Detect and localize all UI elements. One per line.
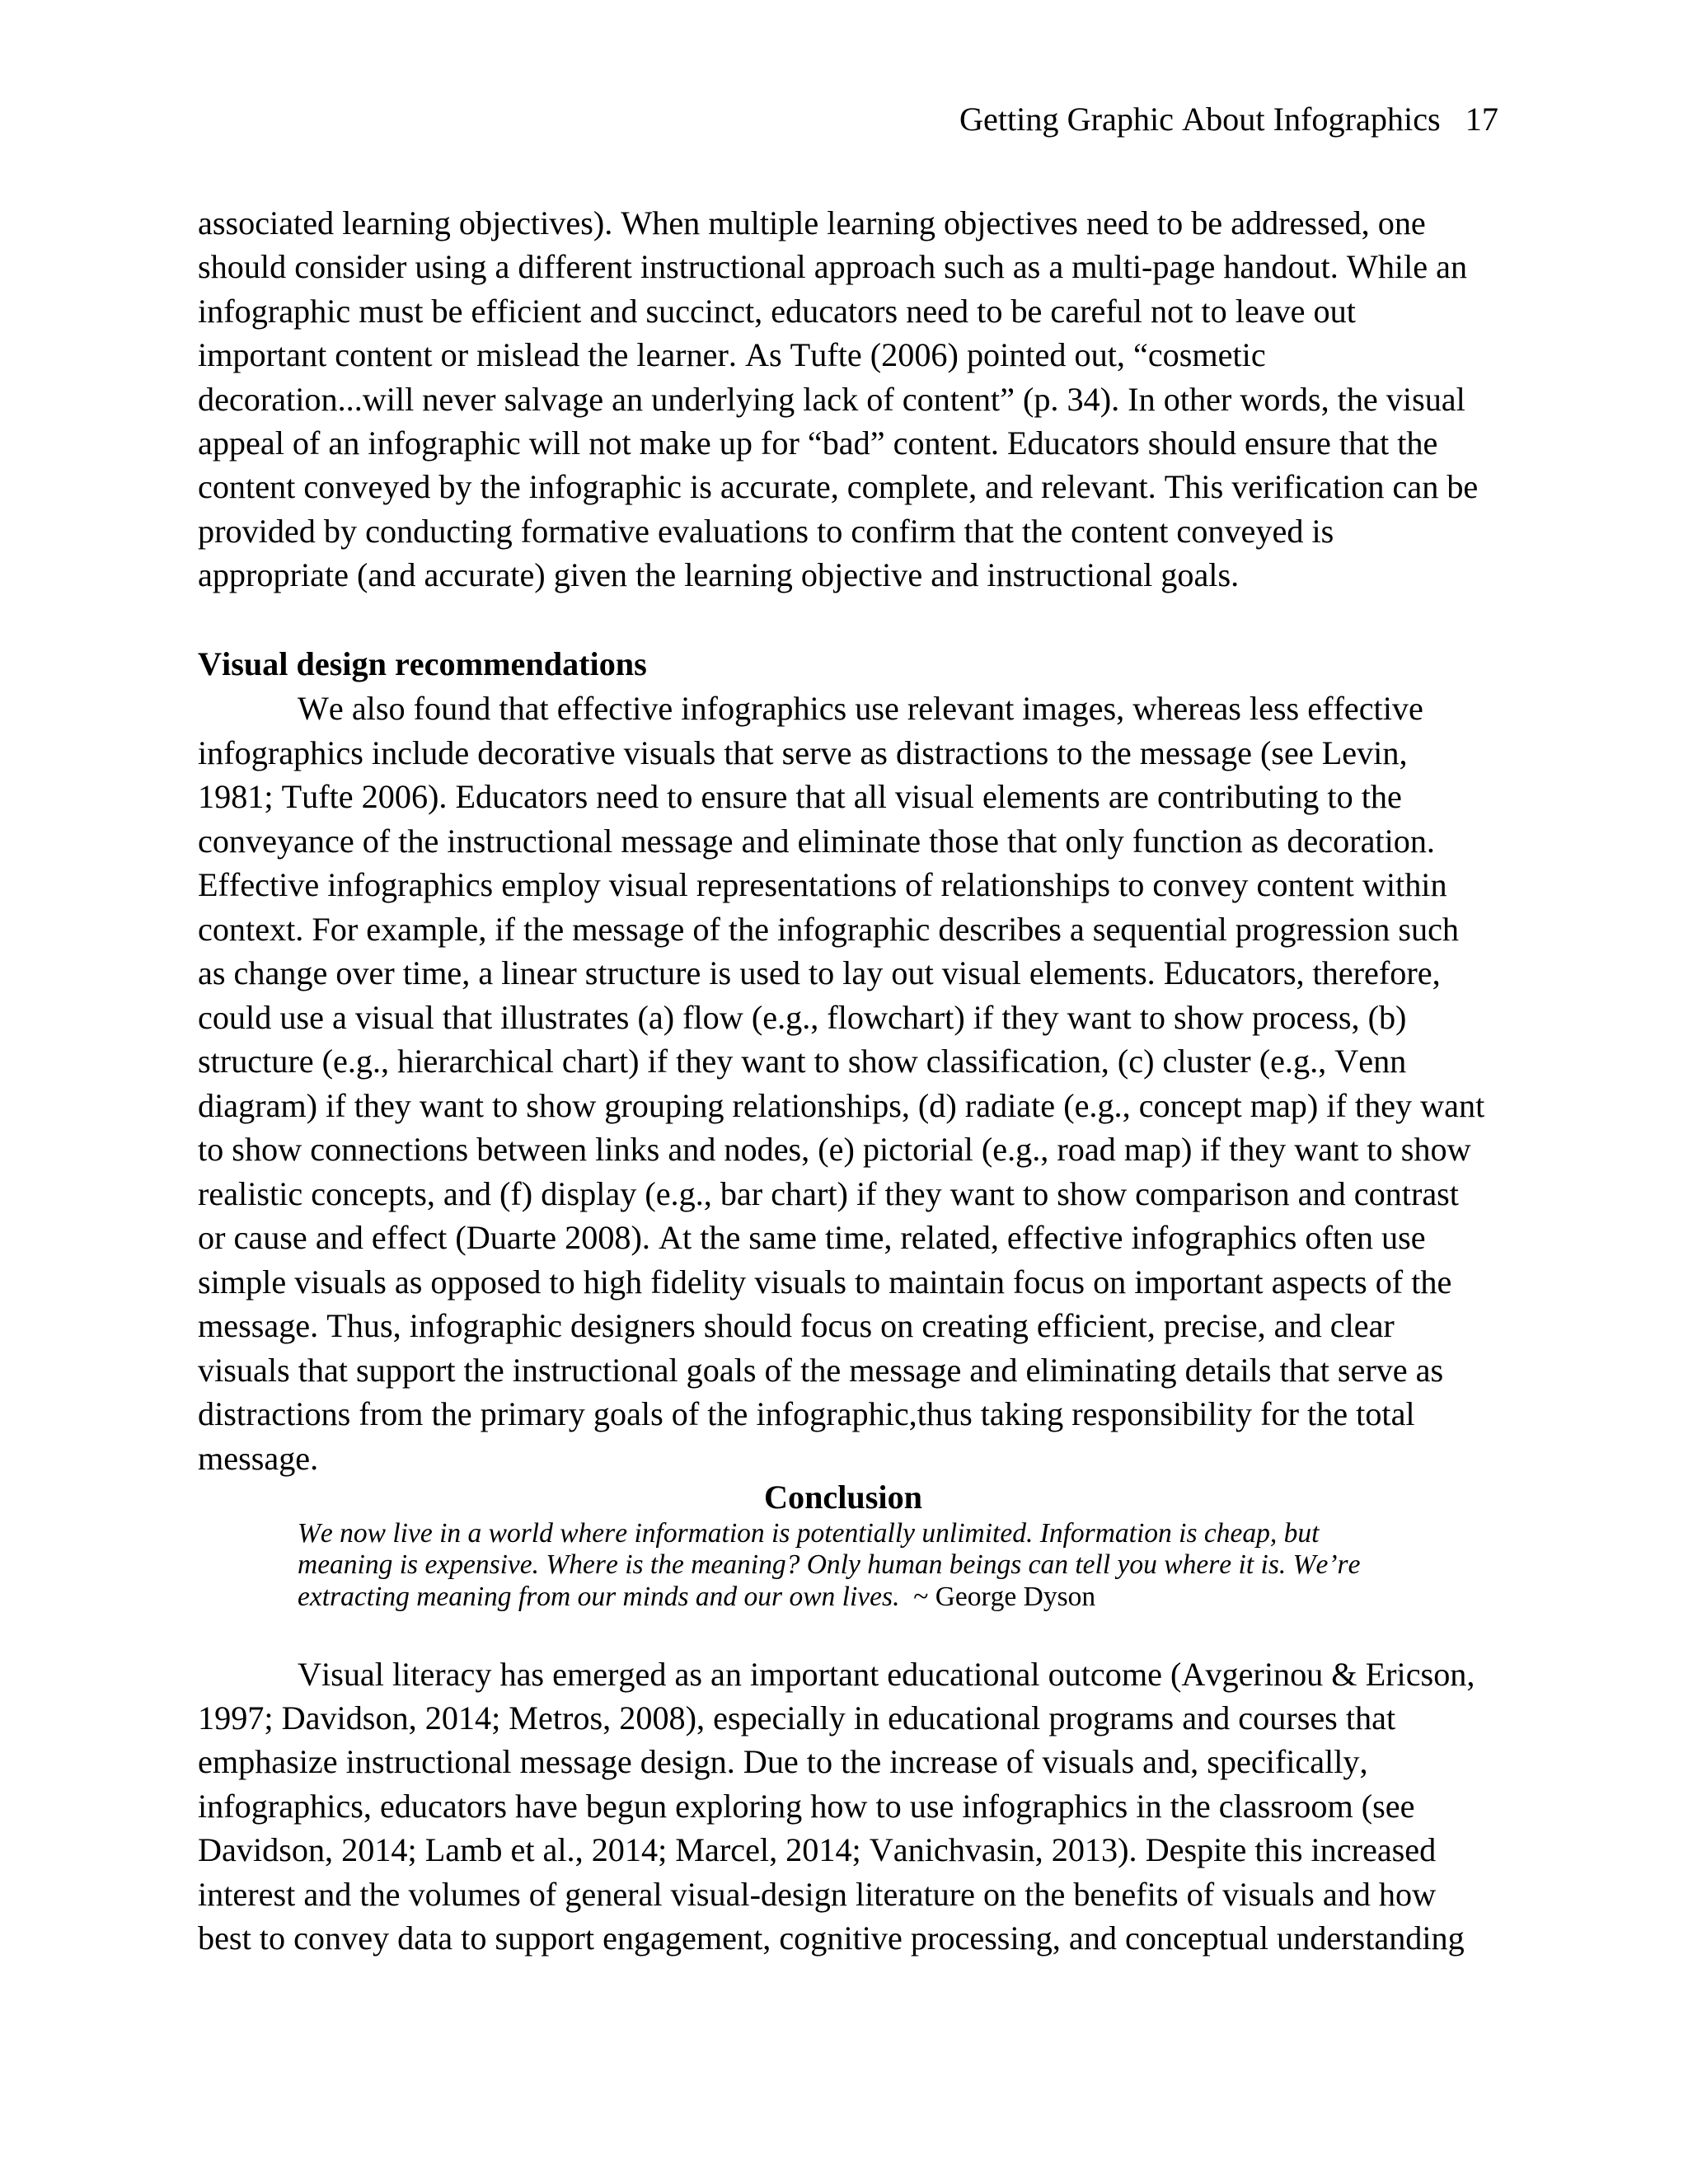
text block: conclusion paragraph: 1997; Davidson, 2014; Metros, 2008), especially in educational programs and courses that bbox=[198, 1699, 1395, 1736]
text block: visual design paragraph: 1981; Tufte 2006). Educators need to ensure that all visual elements are contributing to the bbox=[198, 778, 1402, 815]
text block: visual design paragraph: infographics include decorative visuals that serve as distractions to the message (see Levin, bbox=[198, 734, 1408, 771]
text block: conclusion paragraph bbox=[198, 1656, 1475, 1957]
text block: paragraph on learning objectives: should consider using a different instructional approach such as a multi-page handout. While an bbox=[198, 248, 1467, 285]
text block: visual design paragraph: structure (e.g., hierarchical chart) if they want to show classification, (c) cluster (e.g., Venn bbox=[198, 1043, 1406, 1080]
heading: conclusion: Conclusion bbox=[764, 1479, 922, 1516]
text block: paragraph on learning objectives: content conveyed by the infographic is accurate, complete, and relevant. This verification can be bbox=[198, 468, 1478, 505]
text block: visual design paragraph: diagram) if they want to show grouping relationships, (d) radiate (e.g., concept map) if they want bbox=[198, 1087, 1484, 1124]
text block: visual design paragraph: visuals that support the instructional goals of the message and eliminating details that serve as bbox=[198, 1352, 1443, 1389]
text block: visual design paragraph: could use a visual that illustrates (a) flow (e.g., flowchart) if they want to show process, (b) bbox=[198, 999, 1406, 1036]
text block: visual design paragraph: to show connections between links and nodes, (e) pictorial (e.g., road map) if they want to show bbox=[198, 1131, 1471, 1168]
running header: Getting Graphic About Infographics 17 bbox=[959, 101, 1498, 138]
text block: paragraph on learning objectives: infographic must be efficient and succinct, educators need to be careful not to leave out bbox=[198, 293, 1356, 330]
quote: George Dyson bbox=[298, 1518, 1360, 1612]
text block: conclusion paragraph: interest and the volumes of general visual-design literature on the benefits of visuals and how bbox=[198, 1876, 1436, 1913]
text block: paragraph on learning objectives bbox=[198, 204, 1478, 593]
text block: visual design paragraph: or cause and effect (Duarte 2008). At the same time, related, effective infographics often use bbox=[198, 1219, 1426, 1256]
quote: George Dyson: meaning is expensive. Where is the meaning? Only human beings can tell you where it is. We’re bbox=[298, 1549, 1360, 1580]
text block: paragraph on learning objectives: appeal of an infographic will not make up for “bad” content. Educators should ensure that the bbox=[198, 424, 1437, 462]
text block: visual design paragraph: Effective infographics employ visual representations of relationships to convey content within bbox=[198, 866, 1447, 903]
text block: visual design paragraph bbox=[198, 690, 1485, 1477]
quote: George Dyson: extracting meaning from our minds and our own lives. ~ George Dyson bbox=[298, 1582, 1095, 1612]
text block: conclusion paragraph: emphasize instructional message design. Due to the increase of visuals and, specifically, bbox=[198, 1743, 1368, 1780]
text block: visual design paragraph: conveyance of the instructional message and eliminate those that only function as decoration. bbox=[198, 823, 1435, 860]
text block: paragraph on learning objectives: provided by conducting formative evaluations to confirm that the content conveyed is bbox=[198, 513, 1334, 550]
text block: visual design paragraph: message. Thus, infographic designers should focus on creating efficient, precise, and clear bbox=[198, 1307, 1395, 1344]
text block: paragraph on learning objectives: decoration...will never salvage an underlying lack of content” (p. 34). In other words, the visual bbox=[198, 381, 1465, 418]
text block: visual design paragraph: context. For example, if the message of the infographic describes a sequential progression such bbox=[198, 911, 1459, 948]
text block: conclusion paragraph: Visual literacy has emerged as an important educational outcome (Avgerinou & Ericson, bbox=[298, 1656, 1475, 1693]
heading: visual design recommendations: Visual design recommendations bbox=[198, 644, 647, 682]
text block: paragraph on learning objectives: associated learning objectives). When multiple learning objectives need to be addressed, one bbox=[198, 204, 1426, 241]
text block: visual design paragraph: as change over time, a linear structure is used to lay out visual elements. Educators, therefore, bbox=[198, 954, 1441, 991]
text block: conclusion paragraph: best to convey data to support engagement, cognitive processing, and conceptual understanding bbox=[198, 1919, 1465, 1957]
text block: visual design paragraph: simple visuals as opposed to high fidelity visuals to maintain focus on important aspects of the bbox=[198, 1263, 1451, 1301]
quote: George Dyson: We now live in a world where information is potentially unlimited. Information is cheap, but bbox=[298, 1518, 1319, 1548]
text block: visual design paragraph: realistic concepts, and (f) display (e.g., bar chart) if they want to show comparison and contrast bbox=[198, 1175, 1459, 1212]
text block: visual design paragraph: distractions from the primary goals of the infographic,thus taking responsibility for the total bbox=[198, 1395, 1415, 1432]
text block: paragraph on learning objectives: appropriate (and accurate) given the learning objective and instructional goals. bbox=[198, 556, 1239, 593]
text block: conclusion paragraph: Davidson, 2014; Lamb et al., 2014; Marcel, 2014; Vanichvasin, 2013). Despite this increased bbox=[198, 1831, 1436, 1868]
text block: visual design paragraph: We also found that effective infographics use relevant images, whereas less effective bbox=[298, 690, 1423, 727]
text block: conclusion paragraph: infographics, educators have begun exploring how to use infographics in the classroom (see bbox=[198, 1788, 1414, 1825]
text block: visual design paragraph: message. bbox=[198, 1440, 318, 1477]
text block: paragraph on learning objectives: important content or mislead the learner. As Tufte (2006) pointed out, “cosmetic bbox=[198, 336, 1266, 373]
